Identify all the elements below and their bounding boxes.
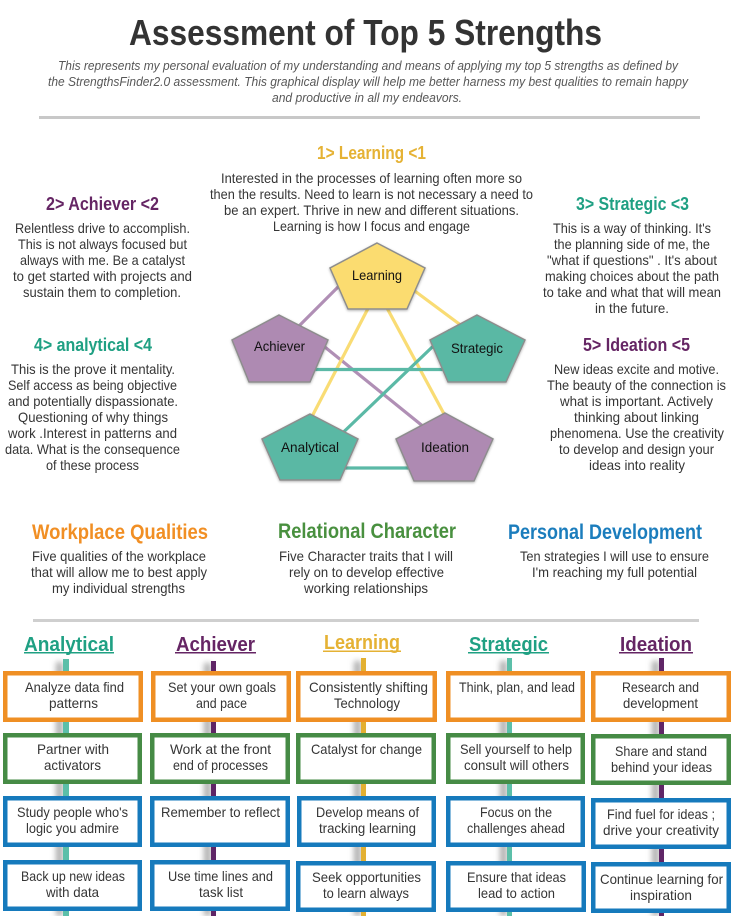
card: continue learning: inspiration xyxy=(630,887,692,903)
card: continue learning xyxy=(593,864,729,911)
learning description: then the results. Need to learn is not necessary a need to xyxy=(210,186,533,202)
column: analytical xyxy=(5,634,141,916)
ideation description: to develop and design your xyxy=(559,441,714,457)
card: shifting technology xyxy=(298,673,435,720)
heading: analytical: 4> analytical <4 xyxy=(34,335,152,355)
connector: analytical xyxy=(56,659,69,916)
card: tracking learning xyxy=(299,798,434,845)
card: partner with activators: Partner with xyxy=(37,741,109,757)
ideation description xyxy=(547,361,726,473)
personal development description: Ten strategies I will use to ensure xyxy=(520,548,709,564)
strategic description: "what if questions" . It's about xyxy=(547,252,717,268)
ideation description: thinking about linking xyxy=(574,409,699,425)
card: fuel for ideas: drive your creativity xyxy=(603,822,719,838)
column: achiever xyxy=(152,634,289,916)
node: ideation: Ideation xyxy=(421,439,469,455)
connector: ideation xyxy=(652,658,664,916)
card: back up new ideas: with data xyxy=(45,884,99,900)
workplace qualities description: Five qualities of the workplace xyxy=(32,548,206,564)
achiever description: This is not always focused but xyxy=(18,236,187,252)
card: study people: Study people who's xyxy=(17,804,128,820)
card: sell yourself: consult will others xyxy=(464,757,569,773)
learning description: Interested in the processes of learning often more so xyxy=(221,170,522,186)
heading: personal development: Personal Development xyxy=(508,521,702,544)
card: time lines: task list xyxy=(199,884,243,900)
learning description: Learning is how I focus and engage xyxy=(273,218,470,234)
heading: learning: 1> Learning <1 xyxy=(317,143,426,163)
card: share and stand: Share and stand xyxy=(615,743,707,759)
card: work at the front xyxy=(152,735,288,782)
relational character description xyxy=(279,548,453,596)
learning description: be an expert. Thrive in new and different situations. xyxy=(224,202,519,218)
analytical description: This is the prove it mentality. xyxy=(11,361,175,377)
node: learning: Learning xyxy=(352,267,402,283)
strategic description: This is a way of thinking. It's xyxy=(553,220,711,236)
panel: achiever strength xyxy=(13,194,192,300)
card: share and stand: behind your ideas xyxy=(611,759,712,775)
card: catalyst for change: Catalyst for change xyxy=(311,741,422,757)
analytical description: data. What is the consequence xyxy=(5,441,180,457)
card: seek opportunities xyxy=(298,863,434,910)
card: research and development: development xyxy=(623,695,698,711)
personal development description xyxy=(520,548,709,580)
relational character description: rely on to develop effective xyxy=(289,564,444,580)
analytical description: work .Interest in patterns and xyxy=(7,425,177,441)
card: partner with activators xyxy=(5,735,140,782)
connector: strategic xyxy=(500,658,512,916)
card: tracking learning: Develop means of xyxy=(316,804,419,820)
node: learning xyxy=(330,243,425,309)
relational character description: working relationships xyxy=(303,580,428,596)
achiever description: Relentless drive to accomplish. xyxy=(15,220,190,236)
card: fuel for ideas xyxy=(593,800,729,847)
card: set your own goals: and pace xyxy=(196,695,247,711)
card: fuel for ideas: Find fuel for ideas ; xyxy=(607,806,715,822)
column: learning xyxy=(298,632,435,916)
workplace qualities description xyxy=(31,548,207,596)
heading: ideation: 5> Ideation <5 xyxy=(583,335,690,355)
panel: relational character xyxy=(278,520,456,596)
column heading: ideation: Ideation xyxy=(620,634,692,656)
analytical description xyxy=(5,361,180,473)
card: sell yourself: Sell yourself to help xyxy=(460,741,572,757)
card: time lines: Use time lines and xyxy=(168,868,273,884)
heading: strategic: 3> Strategic <3 xyxy=(576,194,689,214)
workplace qualities description: my individual strengths xyxy=(52,580,185,596)
strategic description: in the future. xyxy=(595,300,669,316)
node: analytical xyxy=(262,414,358,480)
heading: workplace qualities: Workplace Qualities xyxy=(32,521,208,544)
card: back up new ideas xyxy=(5,862,140,909)
node: achiever: Achiever xyxy=(254,338,305,354)
analytical description: Questioning of why things xyxy=(18,409,168,425)
analytical description: of these process xyxy=(46,457,139,473)
ideation description: New ideas excite and motive. xyxy=(554,361,719,377)
node: analytical: Analytical xyxy=(281,439,339,455)
card: research and development xyxy=(593,673,729,720)
card: seek opportunities: Seek opportunities xyxy=(312,869,421,885)
column heading: achiever: Achiever xyxy=(176,634,255,656)
strategic description: the planning side of me, the xyxy=(554,236,710,252)
card: work at the front: end of processes xyxy=(173,757,268,773)
card: shifting technology: Consistently shifting xyxy=(309,679,428,695)
node: achiever xyxy=(232,315,328,382)
analytical description: and potentially dispassionate. xyxy=(8,393,178,409)
card: focus on challenges: Focus on the xyxy=(480,804,552,820)
subtitle text block: and productive in all my endeavors. xyxy=(272,90,462,105)
panel: learning strength xyxy=(210,143,533,234)
card: share and stand xyxy=(593,736,729,783)
learning description xyxy=(210,170,533,234)
analytical description: Self access as being objective xyxy=(8,377,177,393)
connector: achiever xyxy=(204,661,216,916)
card: tracking learning: tracking learning xyxy=(319,820,416,836)
card: sell yourself xyxy=(448,735,583,782)
achiever description: always with me. Be a catalyst xyxy=(20,252,185,268)
column heading: strategic: Strategic xyxy=(469,634,548,656)
heading: achiever: 2> Achiever <2 xyxy=(46,194,159,214)
card: time lines xyxy=(152,862,288,909)
workplace qualities description: that will allow me to best apply xyxy=(31,564,207,580)
card: ideas to action: lead to action xyxy=(478,885,555,901)
ideation description: ideas into reality xyxy=(589,457,685,473)
card: continue learning: Continue learning for xyxy=(600,871,723,887)
card: analyze data xyxy=(5,673,141,720)
column heading: analytical: Analytical xyxy=(24,634,114,656)
card: catalyst for change xyxy=(298,735,434,782)
card: focus on challenges: challenges ahead xyxy=(467,820,565,836)
personal development description: I'm reaching my full potential xyxy=(532,564,697,580)
subtitle text block xyxy=(48,58,689,105)
achiever description: sustain them to completion. xyxy=(23,284,181,300)
achiever description xyxy=(13,220,192,300)
card: think plan lead: Think, plan, and lead xyxy=(459,679,575,695)
pentagon network diagram xyxy=(232,243,525,481)
subtitle text block: This represents my personal evaluation of my understanding and means of applying my top 5 strengths as defined by xyxy=(58,58,679,73)
node: strategic xyxy=(430,315,525,382)
card: think plan lead xyxy=(448,673,583,720)
subtitle text block: the StrengthsFinder2.0 assessment. This graphical display will help me better harness my best qualities to remain happy xyxy=(48,74,689,89)
card: study people xyxy=(5,798,140,845)
card: ideas to action xyxy=(448,863,584,910)
column: ideation xyxy=(593,634,729,916)
panel: workplace qualities xyxy=(31,521,208,596)
card: set your own goals: Set your own goals xyxy=(168,679,276,695)
ideation description: what is important. Actively xyxy=(559,393,713,409)
strategic description: making choices about the path xyxy=(545,268,719,284)
heading: relational character: Relational Character xyxy=(278,520,456,543)
panel: ideation strength xyxy=(547,335,726,473)
card: shifting technology: Technology xyxy=(334,695,400,711)
achiever description: to get started with projects and xyxy=(13,268,192,284)
card: analyze data: Analyze data find xyxy=(25,679,124,695)
card: remember to reflect xyxy=(152,798,288,845)
panel: strategic strength xyxy=(543,194,721,316)
strategic description xyxy=(543,220,721,316)
card: seek opportunities: to learn always xyxy=(323,885,409,901)
card: research and development: Research and xyxy=(622,679,699,695)
card: partner with activators: activators xyxy=(44,757,101,773)
card: work at the front: Work at the front xyxy=(170,741,271,757)
node: ideation xyxy=(396,413,493,481)
card: focus on challenges xyxy=(448,798,583,845)
card: set your own goals xyxy=(153,673,289,720)
title: Assessment of Top 5 Strengths xyxy=(129,12,602,53)
panel: personal development xyxy=(508,521,709,580)
card: remember to reflect: Remember to reflect xyxy=(161,804,280,820)
node: strategic: Strategic xyxy=(451,340,503,356)
card: study people: logic you admire xyxy=(26,820,119,836)
card: ideas to action: Ensure that ideas xyxy=(467,869,566,885)
card: analyze data: patterns xyxy=(49,695,98,711)
connector: learning xyxy=(354,658,366,916)
panel: analytical strength xyxy=(5,335,180,473)
strategic description: to take and what that will mean xyxy=(543,284,721,300)
card: back up new ideas: Back up new ideas xyxy=(21,868,125,884)
connector lines xyxy=(290,275,470,468)
relational character description: Five Character traits that I will xyxy=(279,548,453,564)
column: strategic xyxy=(448,634,584,916)
column heading: learning: Learning xyxy=(324,632,400,654)
